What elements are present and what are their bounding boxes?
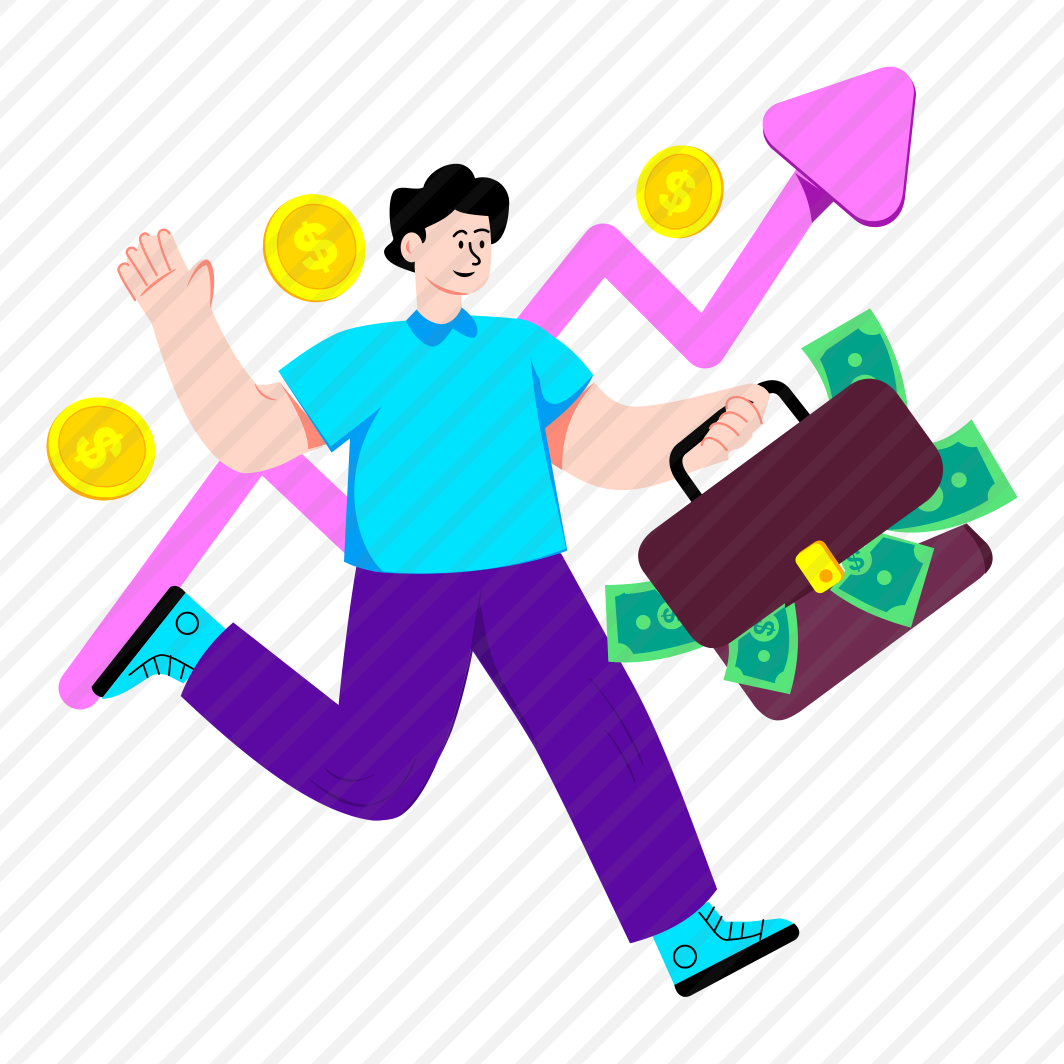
armpit shade [278, 381, 330, 449]
coin: upper left: $ [283, 206, 348, 289]
arrowhead shadow [763, 70, 916, 227]
rising zigzag arrow [80, 67, 916, 688]
arrow shaft shadow [795, 173, 835, 223]
clasp [793, 538, 847, 596]
arrow shaft [80, 157, 830, 688]
knee creases [309, 758, 416, 807]
inner leg shading [471, 605, 541, 753]
banknote: left: $ [655, 606, 689, 625]
briefcase full of money [605, 308, 1018, 720]
coin: lower left: $ [59, 416, 138, 480]
banknote: lower centre [830, 532, 934, 628]
elbow crease [255, 384, 277, 400]
shoe upper [102, 593, 227, 699]
neck and head [384, 164, 509, 324]
fingers [700, 397, 762, 463]
eyebrows [454, 230, 488, 236]
gripping fingers [700, 383, 770, 463]
shirt shadow base [278, 333, 593, 574]
banknote: bottom [723, 597, 798, 694]
crotch shading [399, 588, 481, 817]
raised arm and hand [118, 229, 330, 473]
trousers [181, 553, 717, 943]
nose [470, 243, 479, 264]
banknote: bottom: $ [745, 615, 781, 640]
coin: top centre [624, 134, 736, 249]
hair [384, 164, 509, 277]
shoe sole [92, 586, 186, 697]
shoe eyelet [177, 613, 198, 634]
thumb outline [187, 259, 214, 308]
shirt front [278, 315, 593, 573]
shoe eyelet [674, 946, 696, 968]
right shoe [653, 902, 799, 997]
eyes [459, 240, 484, 249]
coin: top centre: $ [651, 156, 704, 229]
left shoe [92, 586, 227, 699]
briefcase back shade [963, 524, 993, 574]
banknote: top [801, 308, 908, 413]
shin creases [590, 678, 643, 782]
finger outlines [118, 230, 170, 300]
mouth [453, 270, 475, 277]
ear [401, 232, 423, 262]
coin: lower left [30, 380, 172, 518]
briefcase front flap shadow [785, 582, 817, 608]
banknote: right [887, 419, 1018, 533]
shoe upper [653, 902, 797, 987]
banknote: left [605, 580, 703, 662]
briefcase handle [676, 387, 806, 500]
carrying arm [547, 383, 770, 490]
jaw shadow [424, 275, 470, 295]
shoe laces [129, 655, 195, 678]
collar [406, 307, 477, 347]
palm crease [141, 269, 176, 296]
inner ear [406, 240, 412, 254]
arm skin [118, 229, 323, 473]
arm shade under sleeve [537, 382, 595, 470]
shirt [278, 307, 593, 574]
face and neck [415, 209, 491, 324]
shoe sole [674, 923, 799, 997]
thumb [720, 383, 770, 407]
coin: upper left [248, 180, 380, 316]
shoe laces [699, 907, 763, 940]
briefcase front flap [638, 379, 943, 648]
arrowhead [763, 67, 914, 221]
finger outlines [702, 397, 762, 450]
briefcase back panel [710, 523, 992, 720]
banknote: lower centre: $ [842, 542, 869, 579]
